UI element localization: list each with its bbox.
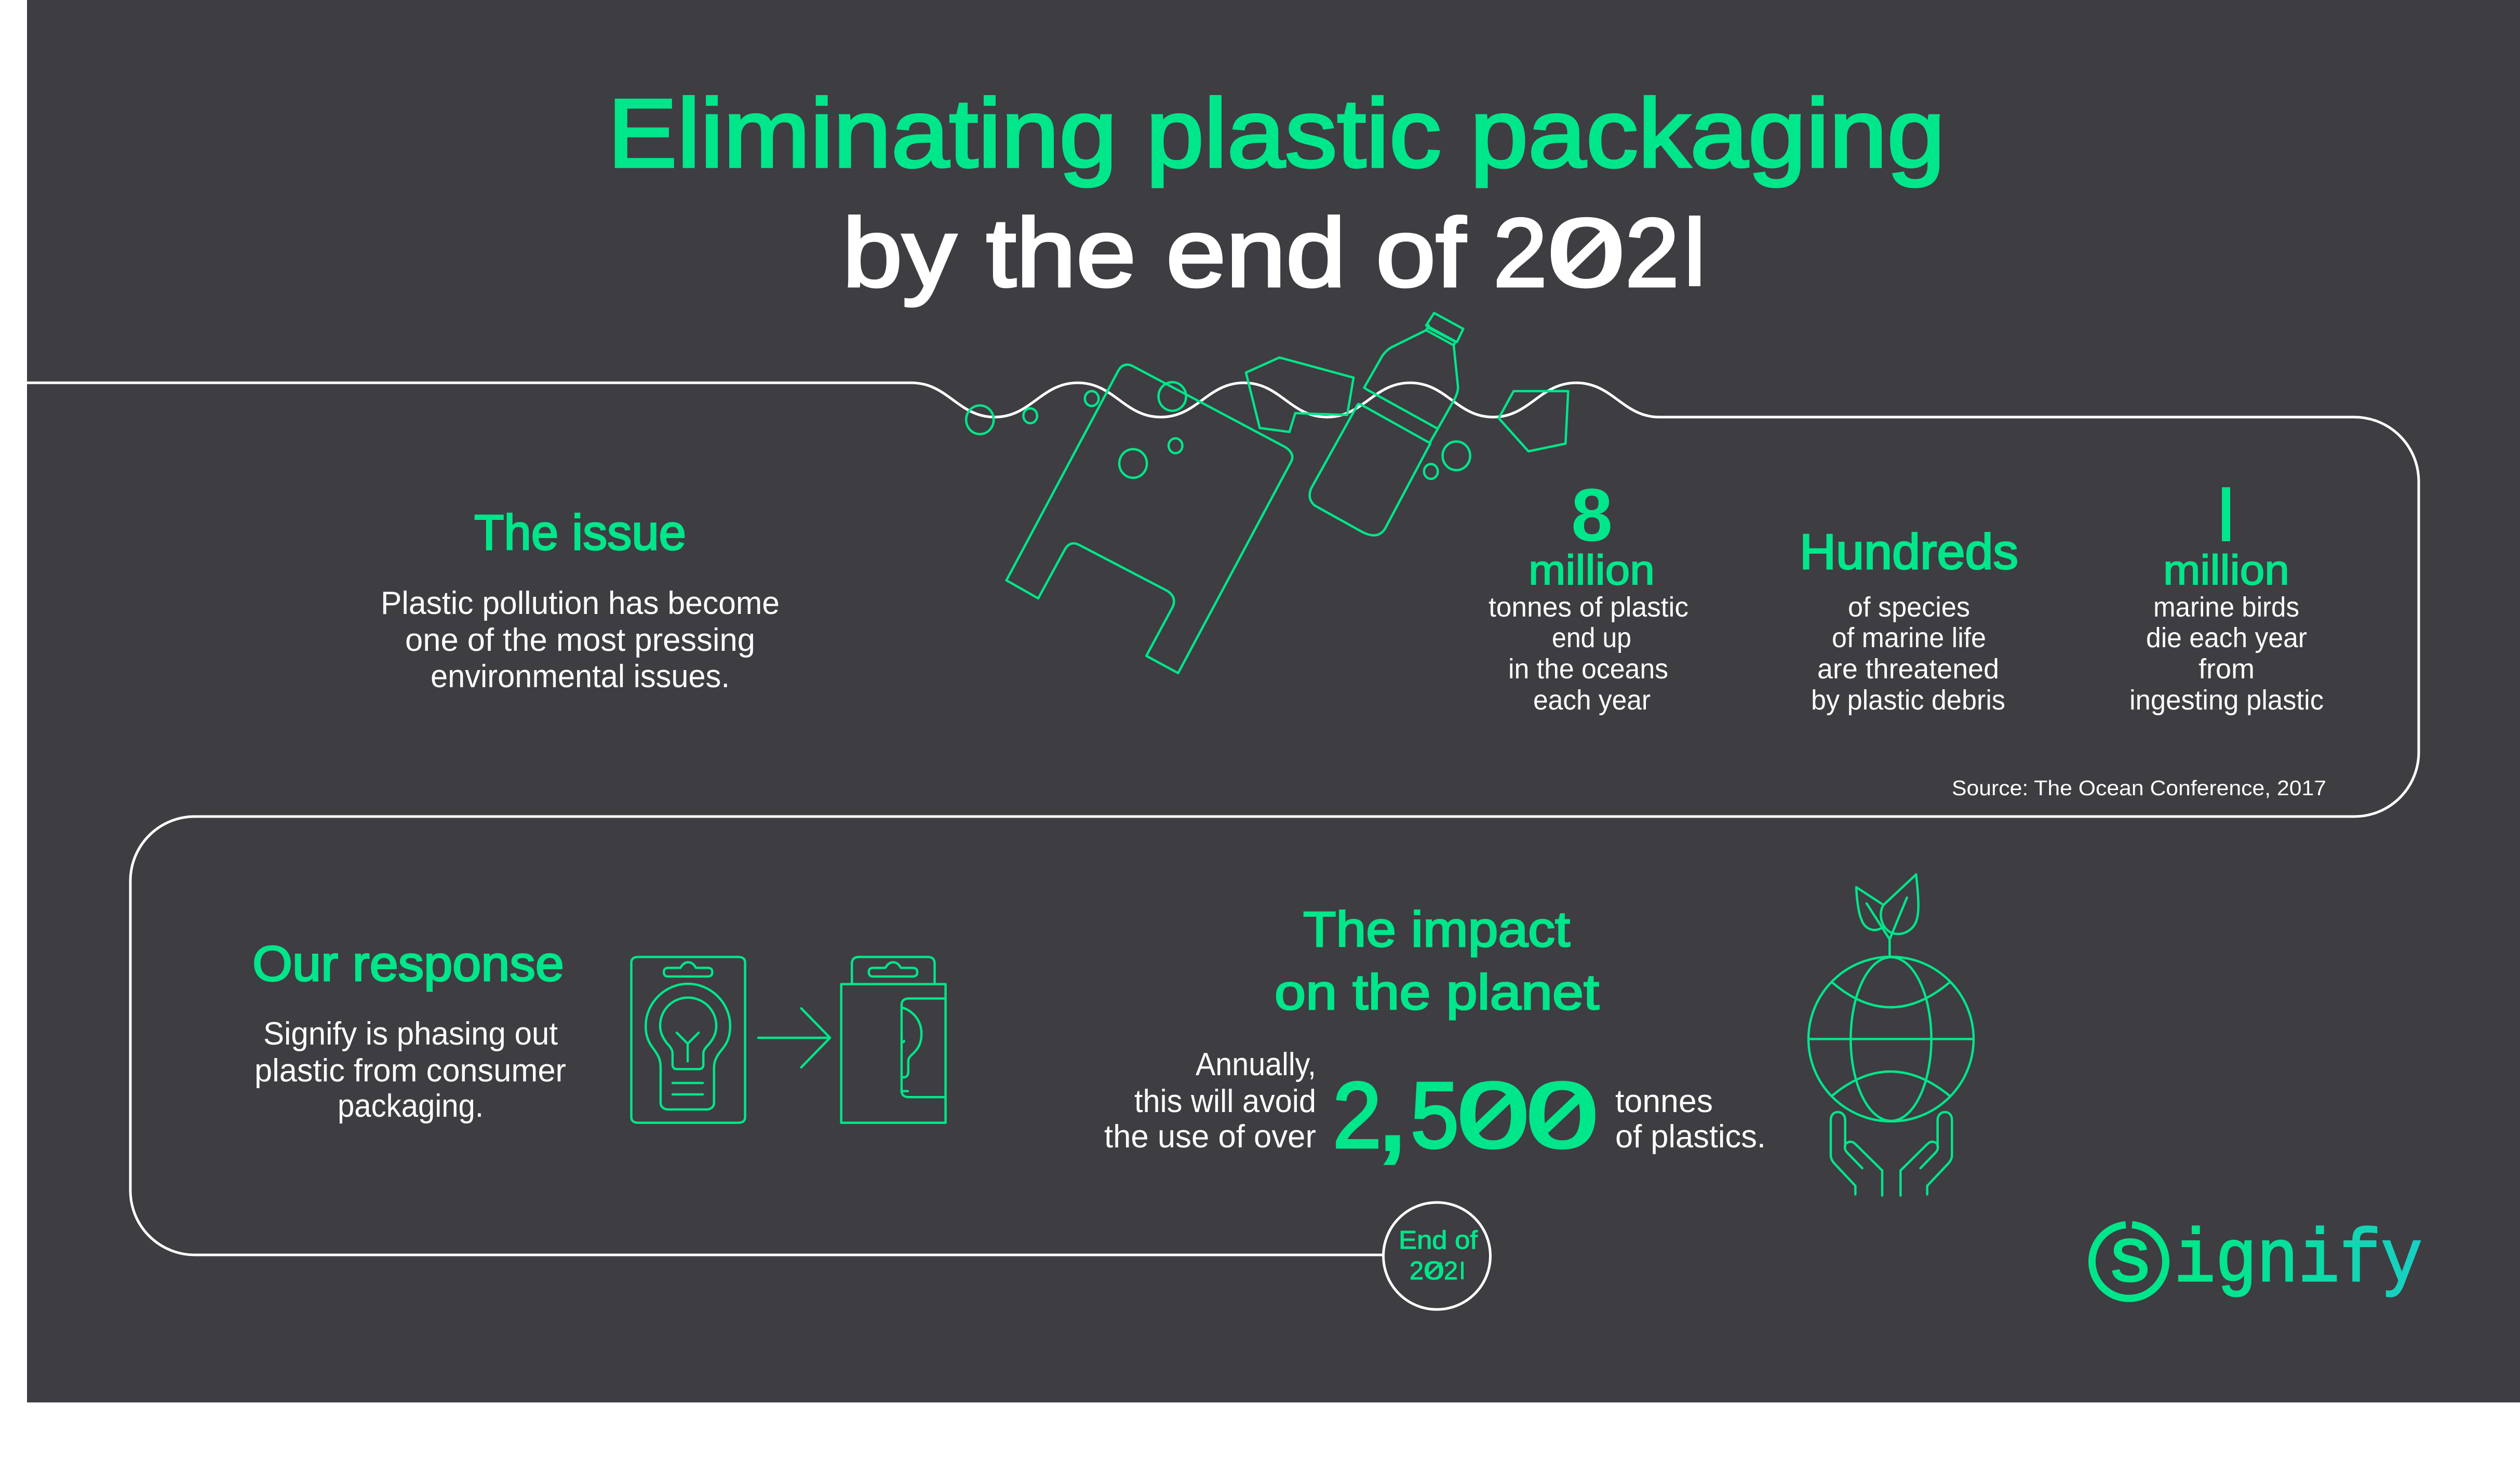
stat description: in the oceans <box>1508 653 1668 685</box>
heading hundreds: Hundreds <box>1800 524 2018 580</box>
label million: million <box>1529 547 1655 594</box>
milestone label <box>1400 1230 1478 1280</box>
number 2,500: 0 <box>1526 1063 1599 1168</box>
title line 2: by the end of <box>842 198 1466 307</box>
number 2,500: 0 <box>1457 1063 1530 1168</box>
stat description <box>2129 592 2324 716</box>
text before number: the use of over <box>1104 1119 1316 1155</box>
icon: blister pack with bulb <box>632 957 745 1123</box>
white journey line with waves <box>27 383 2419 1255</box>
icon: left hand <box>1831 1112 1882 1196</box>
stat: 8 million <box>1489 473 1688 716</box>
stat description: end up <box>1552 622 1631 653</box>
text before number <box>1104 1047 1316 1155</box>
icon: plastic bag <box>1007 365 1292 673</box>
text after number: tonnes <box>1615 1084 1713 1119</box>
heading: our response: Our response <box>252 936 564 992</box>
panel: the issue <box>381 505 780 694</box>
title line 2: 2 <box>1493 198 1547 307</box>
milestone circle: end of 2021 <box>1384 1202 1491 1309</box>
response body text <box>254 1016 566 1124</box>
panel: the impact <box>1104 902 1766 1172</box>
icon: bottle lower part <box>1310 404 1430 536</box>
icon: packaging change <box>632 957 946 1123</box>
stat description: tonnes of plastic <box>1489 592 1688 623</box>
milestone label: 2 <box>1410 1257 1424 1285</box>
number 2,500: , <box>1377 1050 1408 1172</box>
text after number: of plastics. <box>1615 1119 1766 1155</box>
stat: hundreds <box>1800 524 2018 716</box>
arrow <box>758 1008 830 1067</box>
icon: bubbles <box>966 382 1470 479</box>
response body text: Signify is phasing out <box>263 1016 558 1052</box>
stat description: marine birds <box>2153 592 2299 623</box>
issue body text: Plastic pollution has become <box>381 585 780 621</box>
title line 2 <box>848 215 1700 307</box>
title line 1: Eliminating plastic packaging <box>608 79 1945 188</box>
number 1 <box>2222 487 2230 541</box>
issue body text: environmental issues. <box>431 659 730 694</box>
response body text: packaging. <box>338 1088 484 1124</box>
text before number: Annually, <box>1196 1047 1316 1082</box>
stat description: ingesting plastic <box>2129 685 2324 716</box>
stat description: from <box>2199 653 2255 685</box>
logo wordmark: ignify <box>2174 1218 2422 1304</box>
title line 2: 0 <box>1547 198 1625 307</box>
text before number: this will avoid <box>1134 1084 1316 1119</box>
stat description: of marine life <box>1832 622 1986 653</box>
number 8: 8 <box>1571 473 1613 557</box>
milestone label: 0 <box>1424 1257 1444 1285</box>
heading: the impact on the planet: The impact <box>1303 902 1570 957</box>
stat description: each year <box>1533 685 1651 716</box>
logo ring with s <box>2092 1210 2166 1299</box>
icon: plastic fragment right <box>1499 391 1568 451</box>
heading: the impact on the planet: on the planet <box>1275 965 1599 1020</box>
stat: 1 million <box>2129 474 2324 716</box>
icon: globe <box>1808 957 1974 1121</box>
number 2,500: 2 <box>1333 1063 1382 1168</box>
icon: bottle upper part <box>1364 330 1458 443</box>
icon: globe with plant and hands <box>1808 874 1974 1196</box>
milestone label: 2 <box>1444 1257 1458 1285</box>
stat description: die each year <box>2146 622 2307 653</box>
source note: Source: The Ocean Conference, 2017 <box>1952 776 2326 800</box>
panel: our response <box>252 936 566 1124</box>
issue body text: one of the most pressing <box>405 622 755 658</box>
icon: right hand <box>1900 1112 1952 1196</box>
icon: sprout <box>1856 874 1919 957</box>
logo ring with s: s <box>2111 1210 2150 1298</box>
number 2,500: 5 <box>1411 1063 1459 1168</box>
stat description <box>1489 592 1688 716</box>
heading: the issue: The issue <box>474 505 686 560</box>
number 2,500 <box>1333 1050 1599 1172</box>
icon: bottle cap <box>1426 313 1463 345</box>
milestone label: End of <box>1399 1226 1478 1254</box>
icon: cardboard box <box>841 957 946 1123</box>
heading: the impact on the planet <box>1275 902 1599 1020</box>
number 1: 1 <box>2201 474 2243 557</box>
issue body text <box>381 585 780 694</box>
stat description: are threatened <box>1817 653 1999 685</box>
stat description: by plastic debris <box>1811 685 2005 716</box>
stat description <box>1811 592 2005 716</box>
milestone label: 1 <box>1454 1257 1468 1285</box>
response body text: plastic from consumer <box>254 1053 566 1089</box>
icon: plastic fragment left <box>1246 357 1353 432</box>
title <box>608 79 1945 307</box>
title line 2: 2 <box>1625 198 1679 307</box>
icon: floating plastic waste <box>966 313 1568 673</box>
text after number <box>1615 1084 1766 1155</box>
logo: signify <box>2092 1210 2422 1304</box>
label million: million <box>2163 547 2289 594</box>
stat description: of species <box>1848 592 1970 623</box>
title line 2: 1 <box>1663 198 1717 307</box>
